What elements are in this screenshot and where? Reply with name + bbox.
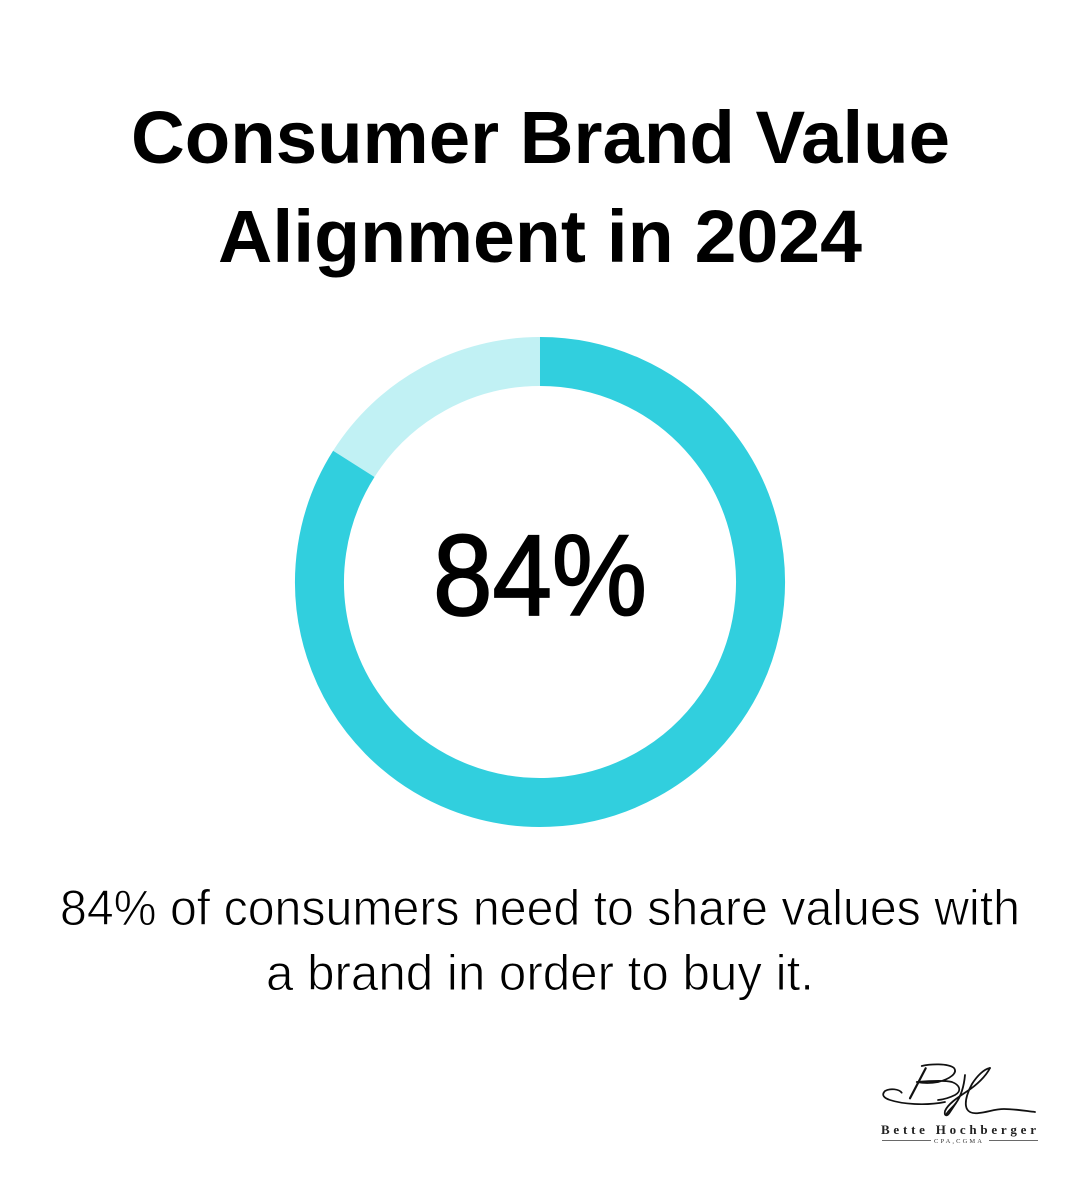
logo monogram <box>883 1064 1035 1115</box>
donut chart: 84% <box>320 362 761 802</box>
description text: 84% of consumers need to share values with <box>60 880 1020 936</box>
description text <box>60 880 1020 1001</box>
title: Consumer Brand Value <box>131 96 950 179</box>
ring segment: 84% <box>320 362 761 802</box>
ring segment: remaining 16% <box>354 362 540 464</box>
donut centre value: 84% <box>433 512 647 640</box>
logo: Bette Hochberger signature <box>881 1064 1038 1145</box>
title <box>131 96 950 278</box>
title: Alignment in 2024 <box>218 195 862 278</box>
logo name: Bette Hochberger <box>881 1122 1036 1137</box>
description text: a brand in order to buy it. <box>266 945 814 1001</box>
logo credentials: CPA,CGMA <box>934 1138 982 1145</box>
